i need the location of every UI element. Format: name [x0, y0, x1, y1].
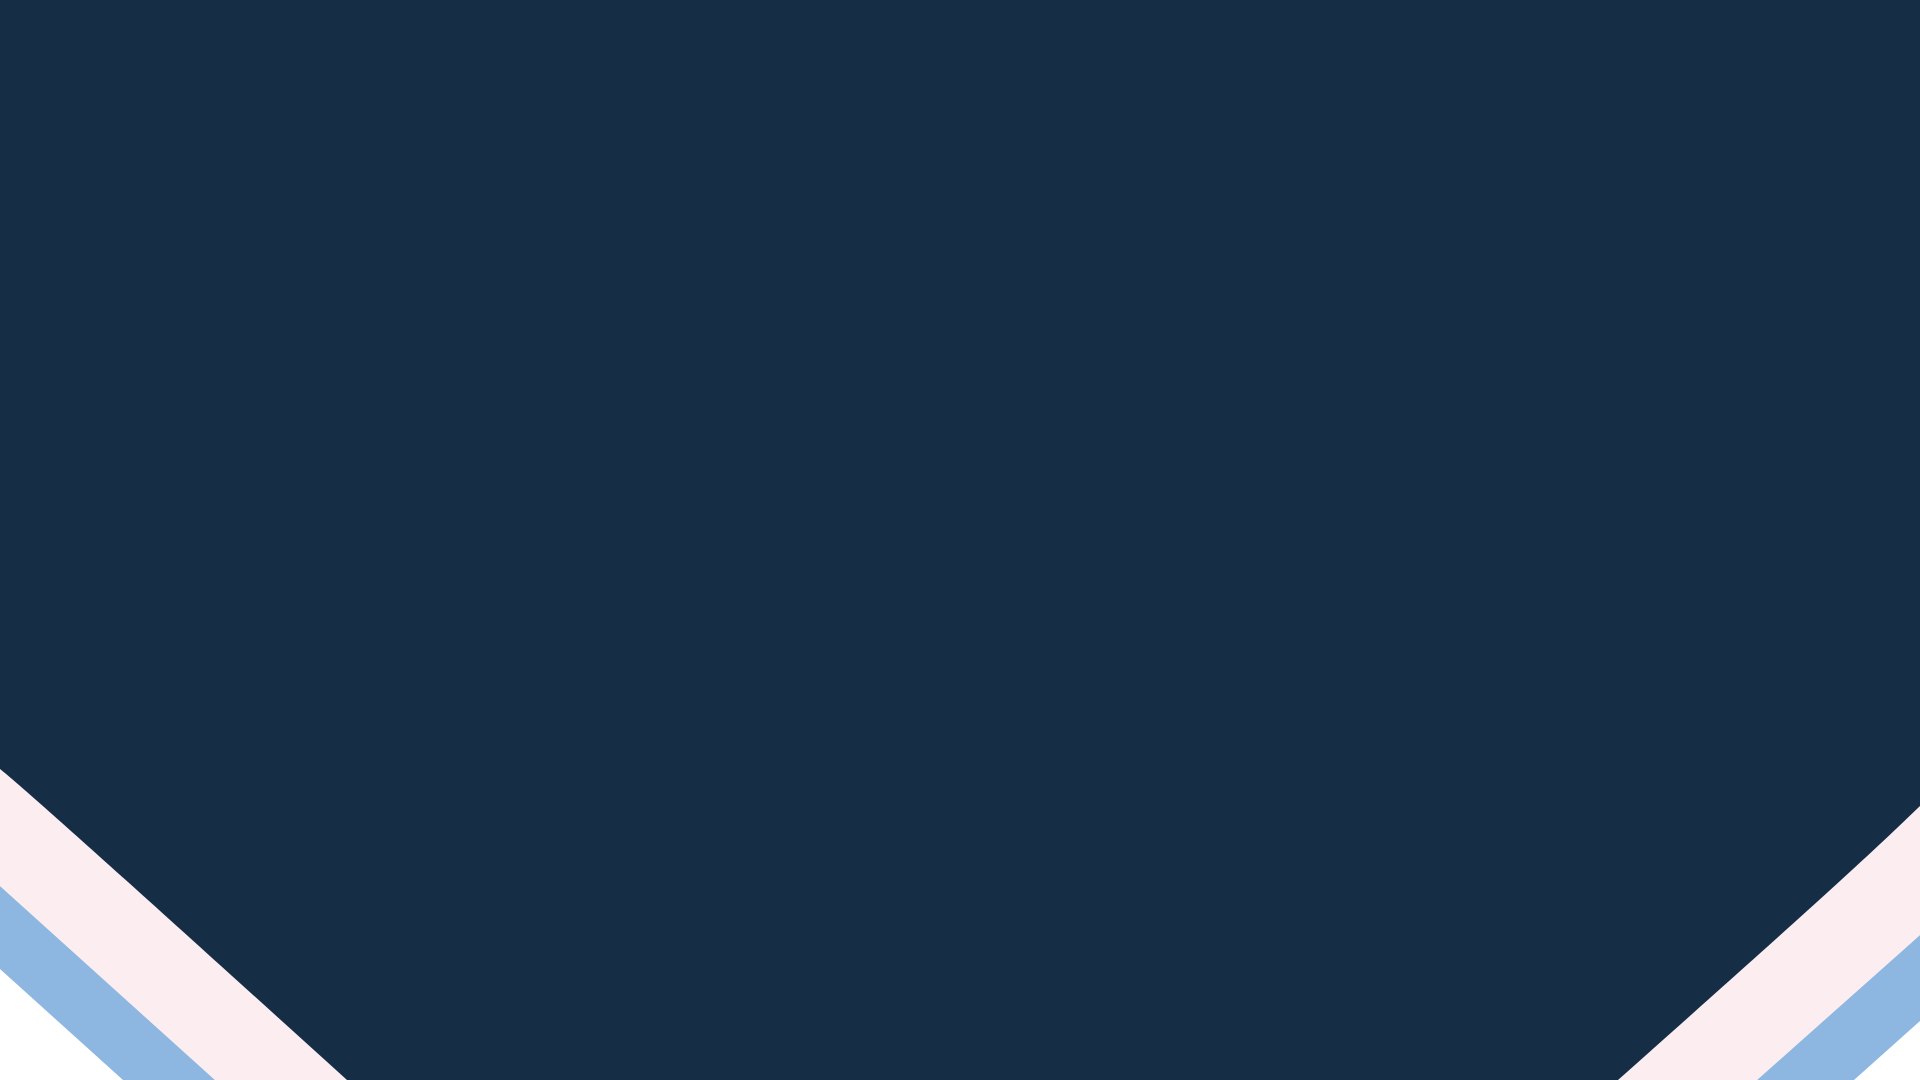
- band: left blue stripe: [0, 886, 215, 1080]
- band: right pink stripe: [1618, 806, 1920, 1080]
- band: right blue stripe: [1757, 935, 1920, 1080]
- band: left pink stripe: [0, 769, 347, 1080]
